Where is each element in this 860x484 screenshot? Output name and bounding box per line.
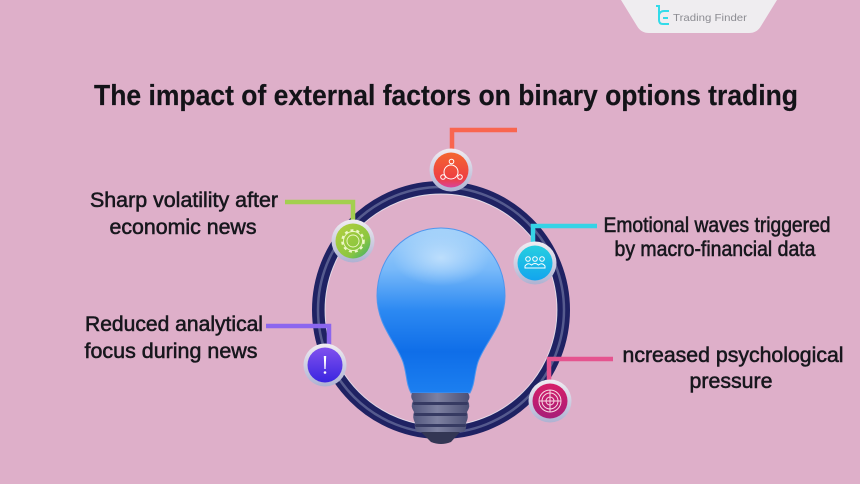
label: sharp volatility: Sharp volatility after — [90, 189, 278, 212]
ring around bulb — [318, 187, 564, 433]
logo wordmark: Trading Finder — [673, 12, 748, 24]
logo tab: Trading Finder — [621, 0, 777, 33]
connector: red — [452, 130, 517, 150]
bulb screw base — [411, 393, 470, 444]
bulb glass — [377, 228, 505, 393]
label: increased psychological pressure — [622, 344, 844, 393]
icon: cyan people — [514, 242, 556, 284]
label: increased psychological pressure: ncreased psychological — [622, 344, 844, 367]
icon: green gear — [332, 220, 374, 262]
label: emotional waves: Emotional waves triggered — [604, 214, 830, 237]
connector: green — [285, 202, 353, 222]
bulb highlight — [393, 230, 489, 286]
label: emotional waves — [604, 214, 830, 261]
icon: pink target — [528, 380, 572, 422]
icon: purple exclamation — [304, 344, 346, 386]
label: reduced analytical focus — [84, 313, 263, 363]
label: increased psychological pressure: pressure — [690, 370, 772, 393]
light bulb — [377, 228, 505, 444]
connector: cyan — [533, 226, 597, 244]
title: The impact of external factors on binary options trading — [94, 80, 798, 112]
label: sharp volatility: economic news — [110, 216, 256, 239]
connector: purple — [266, 326, 329, 346]
logo mark — [656, 6, 669, 24]
label: reduced analytical focus: Reduced analytical — [85, 313, 263, 336]
label: emotional waves: by macro-financial data — [614, 238, 816, 261]
icon: red network — [430, 148, 472, 192]
label: reduced analytical focus: focus during news — [84, 340, 258, 363]
label: sharp volatility — [90, 189, 278, 239]
connector: pink — [549, 359, 613, 381]
